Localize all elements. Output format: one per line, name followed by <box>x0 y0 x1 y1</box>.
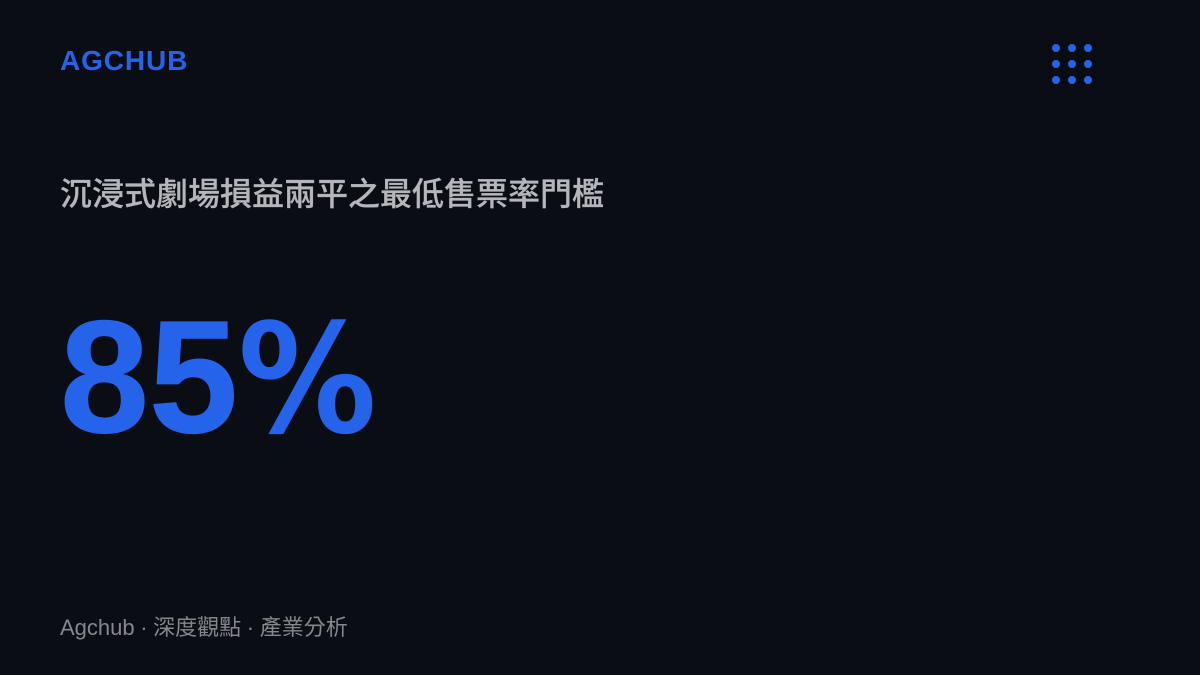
big statistic <box>60 287 377 468</box>
footer text: Agchub · 深度觀點 · 產業分析 <box>60 615 348 640</box>
big statistic: % <box>238 291 377 468</box>
big statistic: 85 <box>60 287 238 466</box>
icon: dot grid <box>1052 44 1092 84</box>
brand logo text: AGCHUB <box>60 45 188 76</box>
heading: 沉浸式劇場損益兩平之最低售票率門檻 <box>60 176 604 212</box>
